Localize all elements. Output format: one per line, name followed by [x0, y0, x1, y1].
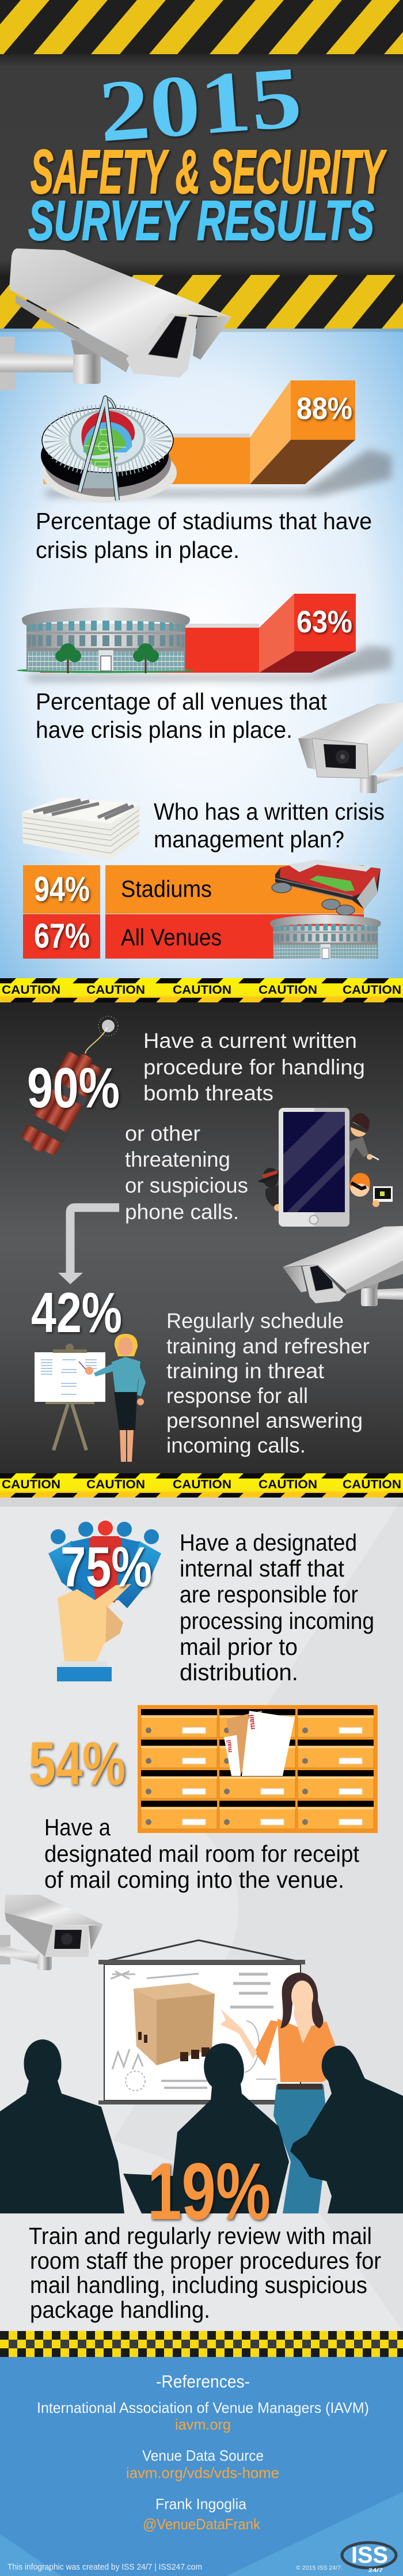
text: stadium crisis plans	[36, 508, 372, 563]
checkered band	[0, 2331, 403, 2357]
icon: tablet	[279, 1108, 349, 1227]
text: written procedure: procedure for handling	[143, 1055, 365, 1079]
icon: audience silhouettes	[0, 2039, 403, 2213]
text: designated internal staff: internal staff that	[180, 1555, 345, 1582]
icon: large security camera over header	[0, 248, 231, 390]
value: 67%: 67%	[34, 917, 90, 955]
value: 90%: 90%	[27, 1056, 120, 1119]
icon: small venue building	[270, 915, 381, 959]
icon: mailboxes: mail	[246, 1714, 257, 1730]
text: written procedure	[143, 1029, 365, 1105]
icon: stack of papers	[22, 797, 140, 860]
panel: mail handling	[0, 1498, 403, 2331]
text: who has a written plan	[154, 798, 385, 853]
caution tape 1: CAUTION	[173, 983, 231, 997]
row: stadiums 94 percent	[23, 865, 364, 914]
reference: IAVM: iavm.org	[175, 2416, 231, 2433]
panel: crisis plans	[0, 329, 403, 978]
panel: threats	[0, 1002, 403, 1473]
logo: ISS 24/7: ISS	[351, 2543, 388, 2568]
text: train and review: package handling.	[30, 2296, 210, 2323]
caution tape 2: CAUTION	[173, 1478, 231, 1491]
text: suspicious phone calls	[125, 1122, 248, 1224]
text: designated internal staff: are responsible for	[180, 1581, 358, 1608]
caution tape 2: CAUTION	[343, 1478, 401, 1491]
text: designated internal staff	[180, 1529, 374, 1685]
icon: presentation screen	[98, 1940, 305, 2104]
caution tape 1: CAUTION	[343, 983, 401, 997]
text: train and review: mail handling, including suspicious	[30, 2272, 367, 2298]
text: stadium crisis plans: crisis plans in place.	[36, 537, 239, 563]
icon: round stadium	[41, 398, 177, 503]
text: regularly schedule training: Regularly schedule	[166, 1309, 344, 1333]
logo: ISS 24/7: 24/7	[368, 2567, 383, 2573]
doodles	[111, 1971, 276, 2091]
text: regularly schedule training: response for all	[166, 1384, 308, 1408]
icon: security camera facing front	[298, 703, 403, 793]
reference: Frank Ingoglia: Frank Ingoglia	[155, 2495, 247, 2513]
text: train and review: Train and regularly review with mail	[29, 2223, 372, 2249]
text: regularly schedule training: training in threat	[166, 1359, 325, 1383]
reference: venue data source: iavm.org/vds/vds-home	[126, 2464, 279, 2481]
text: suspicious phone calls: or other	[125, 1122, 200, 1145]
icon: mailboxes	[138, 1705, 378, 1833]
text: written procedure: bomb threats	[143, 1081, 273, 1105]
text: venue crisis plans	[36, 688, 328, 743]
text: regularly schedule training: training and refresher	[166, 1334, 370, 1358]
text: designated internal staff: Have a designated	[180, 1529, 357, 1556]
text: venue crisis plans: Percentage of all venues that	[36, 688, 328, 715]
text: who has a written plan: management plan?	[154, 826, 344, 853]
reference: venue data source	[126, 2447, 279, 2481]
value: 54%: 54%	[29, 1730, 126, 1798]
text: designated mail room: designated mail room for receipt	[44, 1840, 360, 1867]
caution tape 2: CAUTION	[2, 1478, 60, 1491]
label: all venues: All Venues	[121, 924, 222, 951]
value: 63%: 63%	[296, 605, 352, 639]
icon: thief with key	[349, 1113, 379, 1160]
title: 2015: 2015	[96, 48, 305, 160]
text: designated internal staff: distribution.	[180, 1659, 298, 1685]
text: stadium crisis plans: Percentage of stadiums that have	[36, 508, 372, 534]
icon: security camera facing right	[0, 1895, 103, 1970]
text: venue crisis plans: have crisis plans in place.	[36, 716, 292, 743]
panel: header	[0, 0, 403, 329]
icon: security camera facing left	[283, 1226, 403, 1306]
caution tape 1	[0, 978, 403, 1002]
text: train and review: room staff the proper procedures for	[30, 2247, 381, 2274]
text: regularly schedule training	[166, 1309, 370, 1457]
value: 94%: 94%	[34, 870, 90, 908]
chart: 88 percent stadium bar	[43, 380, 391, 497]
caution tape 1: CAUTION	[258, 983, 317, 997]
reference: IAVM: International Association of Venue Managers (IAVM)	[37, 2399, 369, 2416]
logo: ISS 24/7	[342, 2543, 396, 2573]
reference: venue data source: Venue Data Source	[142, 2447, 264, 2464]
label: stadiums: Stadiums	[121, 876, 212, 902]
icon: man in hat	[257, 1168, 281, 1211]
text: suspicious phone calls: phone calls.	[125, 1200, 239, 1224]
icon: presenter woman	[220, 1972, 337, 2213]
text: designated mail room: Have a	[44, 1814, 111, 1840]
text: regularly schedule training: incoming calls.	[166, 1434, 306, 1457]
icon: dynamite	[18, 1016, 118, 1160]
copyright: © 2015 ISS 24/7.	[296, 2565, 343, 2571]
text: designated internal staff: mail prior to	[180, 1634, 298, 1660]
icon: hand holding people	[48, 1521, 161, 1681]
text: suspicious phone calls: or suspicious	[125, 1174, 248, 1197]
value: 42%: 42%	[31, 1281, 122, 1344]
caution tape 1: CAUTION	[86, 983, 145, 997]
value: 75%: 75%	[60, 1535, 152, 1598]
reference: Frank Ingoglia: @VenueDataFrank	[143, 2515, 261, 2533]
text: regularly schedule training: personnel answering	[166, 1409, 363, 1432]
icon: venue building	[17, 608, 194, 673]
text: designated mail room	[44, 1814, 360, 1893]
caution tape 2: CAUTION	[258, 1478, 317, 1491]
icon: mailboxes: mail	[226, 1740, 234, 1753]
text: suspicious phone calls: threatening	[125, 1148, 230, 1171]
value: 19%: 19%	[147, 2146, 271, 2236]
caution tape 2	[0, 1473, 403, 1498]
reference: IAVM	[37, 2399, 369, 2433]
text: designated internal staff: processing incoming	[180, 1608, 374, 1634]
text: train and review	[29, 2223, 381, 2323]
reference: Frank Ingoglia	[143, 2495, 261, 2533]
panel: references footer	[0, 2357, 403, 2576]
value: 88%: 88%	[296, 391, 352, 426]
icon: small stadium	[272, 860, 381, 915]
caution tape 1: CAUTION	[2, 983, 60, 997]
icon: hacker with tablet	[349, 1173, 393, 1210]
credit line: This infographic was created by ISS 24/7 | ISS247.com	[7, 2563, 202, 2572]
row: all venues 67 percent	[23, 914, 364, 959]
icon: trainer at flip board	[35, 1334, 146, 1462]
caution tape 2: CAUTION	[86, 1478, 145, 1491]
heading: references: -References-	[156, 2371, 250, 2392]
text: written procedure: Have a current written	[143, 1029, 357, 1053]
text: who has a written plan: Who has a written crisis	[154, 798, 385, 825]
arrow: down to 42 percent	[58, 1208, 119, 1284]
chart: 63 percent venue bar	[29, 594, 391, 681]
text: designated mail room: of mail coming into the venue.	[44, 1866, 344, 1893]
icon: cardboard box	[134, 1983, 215, 2065]
